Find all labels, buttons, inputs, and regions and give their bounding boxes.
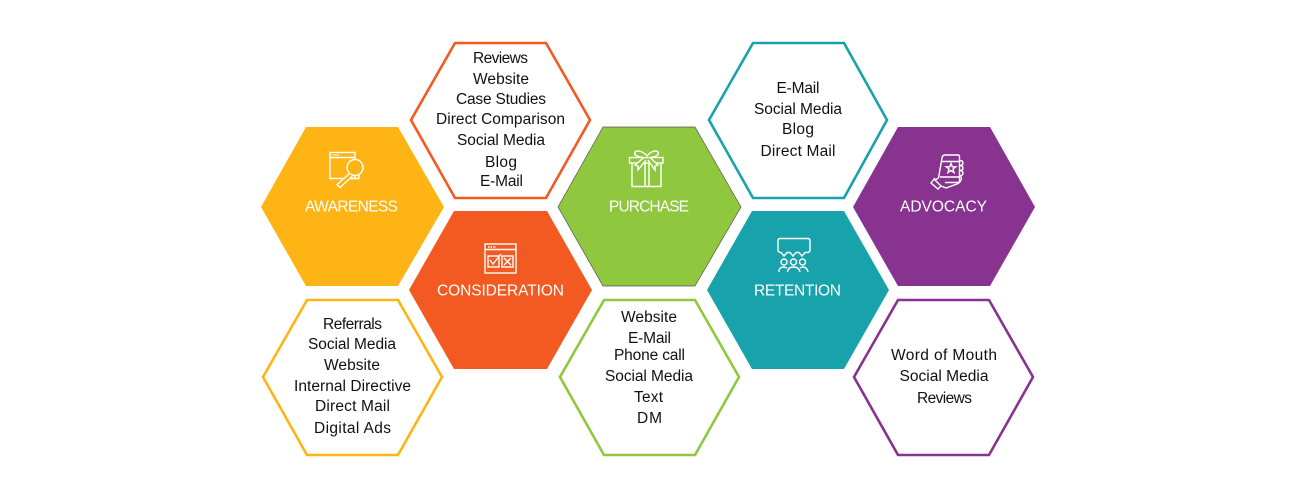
text block: consideration channels: Social Media [457, 132, 545, 149]
text block: retention channels: Blog [782, 121, 814, 138]
text block: awareness channels: Social Media [308, 336, 396, 353]
panel: advocacy hexagon [853, 127, 1035, 286]
text block: retention channels: E-Mail [776, 80, 820, 97]
icon: browser window with check and cross boxes [485, 244, 516, 273]
text block: awareness channels: Internal Directive [294, 378, 411, 395]
icon: browser window with magnifier [330, 152, 363, 188]
text block: purchase channels [605, 309, 693, 427]
panel: purchase channels [560, 300, 739, 455]
panel: retention hexagon [707, 211, 889, 369]
text block: consideration channels [436, 50, 565, 190]
heading: advocacy: ADVOCACY [900, 198, 987, 216]
panel: awareness hexagon [261, 127, 444, 286]
text block: consideration channels: Direct Comparison [436, 111, 565, 128]
text block: advocacy channels: Word of Mouth [891, 347, 997, 364]
text block: awareness channels: Digital Ads [314, 420, 391, 437]
heading: consideration: CONSIDERATION [437, 282, 564, 300]
text block: purchase channels: Phone call [614, 347, 685, 364]
text block: consideration channels: Reviews [473, 50, 528, 67]
icon: hand holding phone with star [931, 155, 963, 189]
text block: purchase channels: DM [637, 410, 662, 427]
panel: advocacy channels [854, 300, 1033, 455]
text block: advocacy channels [891, 347, 997, 407]
text block: purchase channels: Text [634, 389, 664, 406]
text block: retention channels [754, 80, 842, 160]
text block: retention channels: Social Media [754, 101, 842, 118]
panel: purchase hexagon [558, 127, 741, 286]
text block: consideration channels: Case Studies [456, 91, 546, 108]
icon: audience with speech bubble [778, 238, 810, 272]
text block: awareness channels [294, 316, 411, 437]
panel: consideration channels [411, 43, 590, 198]
panel: retention channels [709, 43, 887, 198]
heading: purchase: PURCHASE [609, 198, 689, 216]
text block: advocacy channels: Social Media [900, 368, 989, 385]
panel: consideration hexagon [409, 211, 592, 369]
panel: awareness channels [263, 300, 442, 455]
heading: retention: RETENTION [754, 282, 841, 300]
text block: awareness channels: Direct Mail [315, 398, 390, 415]
text block: consideration channels: E-Mail [480, 173, 523, 190]
text block: retention channels: Direct Mail [760, 143, 836, 160]
text block: consideration channels: Blog [485, 154, 517, 171]
text block: awareness channels: Website [324, 357, 380, 374]
text block: purchase channels: Social Media [605, 368, 693, 385]
text block: consideration channels: Website [473, 71, 529, 88]
text block: awareness channels: Referrals [323, 316, 382, 333]
heading: awareness: AWARENESS [305, 198, 398, 216]
text block: purchase channels: Website [621, 309, 677, 326]
text block: advocacy channels: Reviews [917, 390, 972, 407]
text block: purchase channels: E-Mail [628, 330, 671, 347]
icon: gift box [630, 151, 663, 186]
